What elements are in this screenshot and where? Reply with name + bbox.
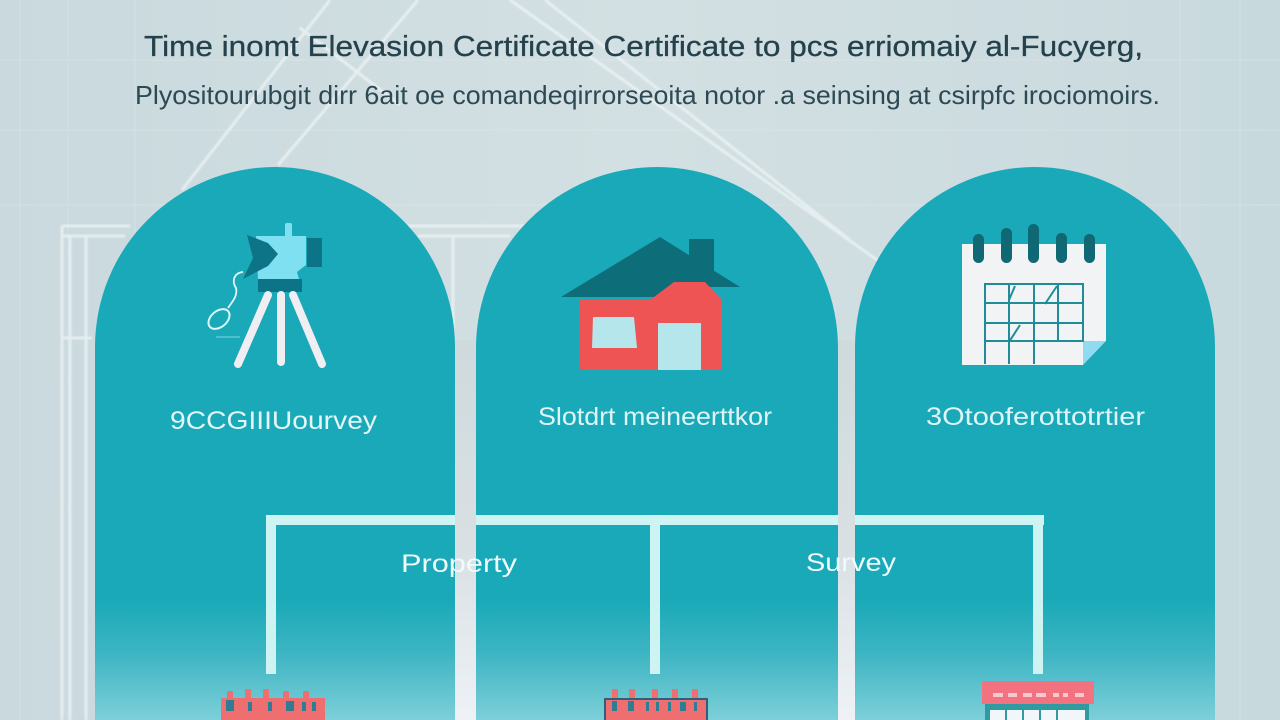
- flow connector: [266, 515, 1044, 674]
- label: property: Slotdrt meineerttkor: [538, 403, 772, 431]
- panel: survey arch: [95, 167, 455, 720]
- icon: bottom calendar left: [221, 689, 325, 720]
- icon: bottom calendar middle: [604, 689, 708, 720]
- label: Survey: Survey: [806, 549, 897, 577]
- icon: house: [561, 237, 740, 370]
- divider strip right: [838, 340, 855, 720]
- panel: property arch: [476, 167, 838, 720]
- icon: bottom calendar right: [982, 681, 1094, 720]
- icon: calendar: [962, 224, 1106, 365]
- icon: surveying tripod: [205, 223, 322, 364]
- title: Time inomt Elevasion Certificate Certificate to pcs erriomaiy al-Fucyerg,: [144, 31, 1143, 63]
- label: schedule: 3Otooferottotrtier: [926, 403, 1145, 431]
- subtitle: Plyositourubgit dirr 6ait oe comandeqirrorseoita notor .a seinsing at csirpfc irociomoirs.: [135, 80, 1160, 110]
- divider strip left: [455, 340, 476, 720]
- label: Property: Property: [401, 550, 518, 578]
- panel: schedule arch: [855, 167, 1215, 720]
- label: survey: 9CCGIIIUourvey: [170, 407, 378, 435]
